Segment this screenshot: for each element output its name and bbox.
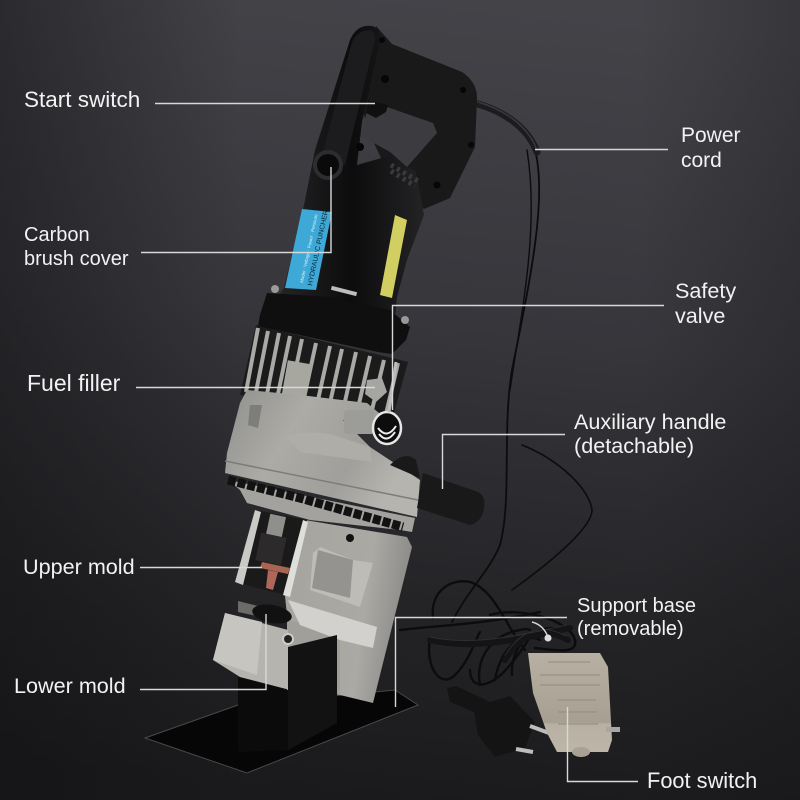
label: fuel filler: Fuel filler xyxy=(27,370,121,396)
housing vents xyxy=(391,165,418,186)
lower flange xyxy=(228,480,415,532)
label: support base: (removable) xyxy=(577,618,684,640)
pedal xyxy=(528,653,612,752)
label: support base: Support base xyxy=(577,595,696,617)
blue label: Model · Voltage · Power · Pressure xyxy=(299,213,319,283)
plug xyxy=(447,686,549,757)
die opening xyxy=(288,534,377,648)
label: safety valve: valve xyxy=(675,303,725,328)
label: power cord: Power xyxy=(681,124,741,147)
yellow warning label xyxy=(380,215,407,298)
motor housing xyxy=(262,26,424,345)
bolt flange xyxy=(228,480,403,527)
support bracket xyxy=(238,635,337,752)
base plate xyxy=(145,690,418,773)
auxiliary handle xyxy=(390,456,484,525)
carbon brush cover xyxy=(315,152,341,178)
cooling fins xyxy=(240,325,408,420)
label: lower mold: Lower mold xyxy=(14,673,126,698)
blue label xyxy=(285,209,332,290)
label: foot switch: Foot switch xyxy=(647,768,757,793)
safety valve knob xyxy=(373,362,401,444)
machine xyxy=(213,26,484,750)
pump body xyxy=(225,390,420,517)
label: carbon brush cover: Carbon xyxy=(24,224,90,246)
label: safety valve: Safety xyxy=(675,278,736,303)
label: upper mold: Upper mold xyxy=(23,554,135,579)
C-frame xyxy=(285,520,412,703)
fuel filler bolt xyxy=(365,378,387,402)
lower mold xyxy=(213,601,293,690)
handle opening xyxy=(362,100,437,167)
label: power cord: cord xyxy=(681,149,722,172)
bracket front over mold xyxy=(288,635,337,750)
label: auxiliary handle: Auxiliary handle xyxy=(574,409,726,434)
label: auxiliary handle: (detachable) xyxy=(574,433,694,458)
handle loop xyxy=(360,26,477,209)
black collar xyxy=(258,285,410,354)
blue label: HYDRAULIC PUNCHER xyxy=(307,210,330,286)
label: start switch: Start switch xyxy=(24,87,140,112)
leader lines xyxy=(136,104,668,782)
upper mold xyxy=(235,510,308,597)
label: carbon brush cover: brush cover xyxy=(24,248,129,270)
handle screws and trigger xyxy=(356,37,474,188)
foot switch with plug xyxy=(447,653,620,757)
power cord and foot switch cables xyxy=(400,102,592,685)
